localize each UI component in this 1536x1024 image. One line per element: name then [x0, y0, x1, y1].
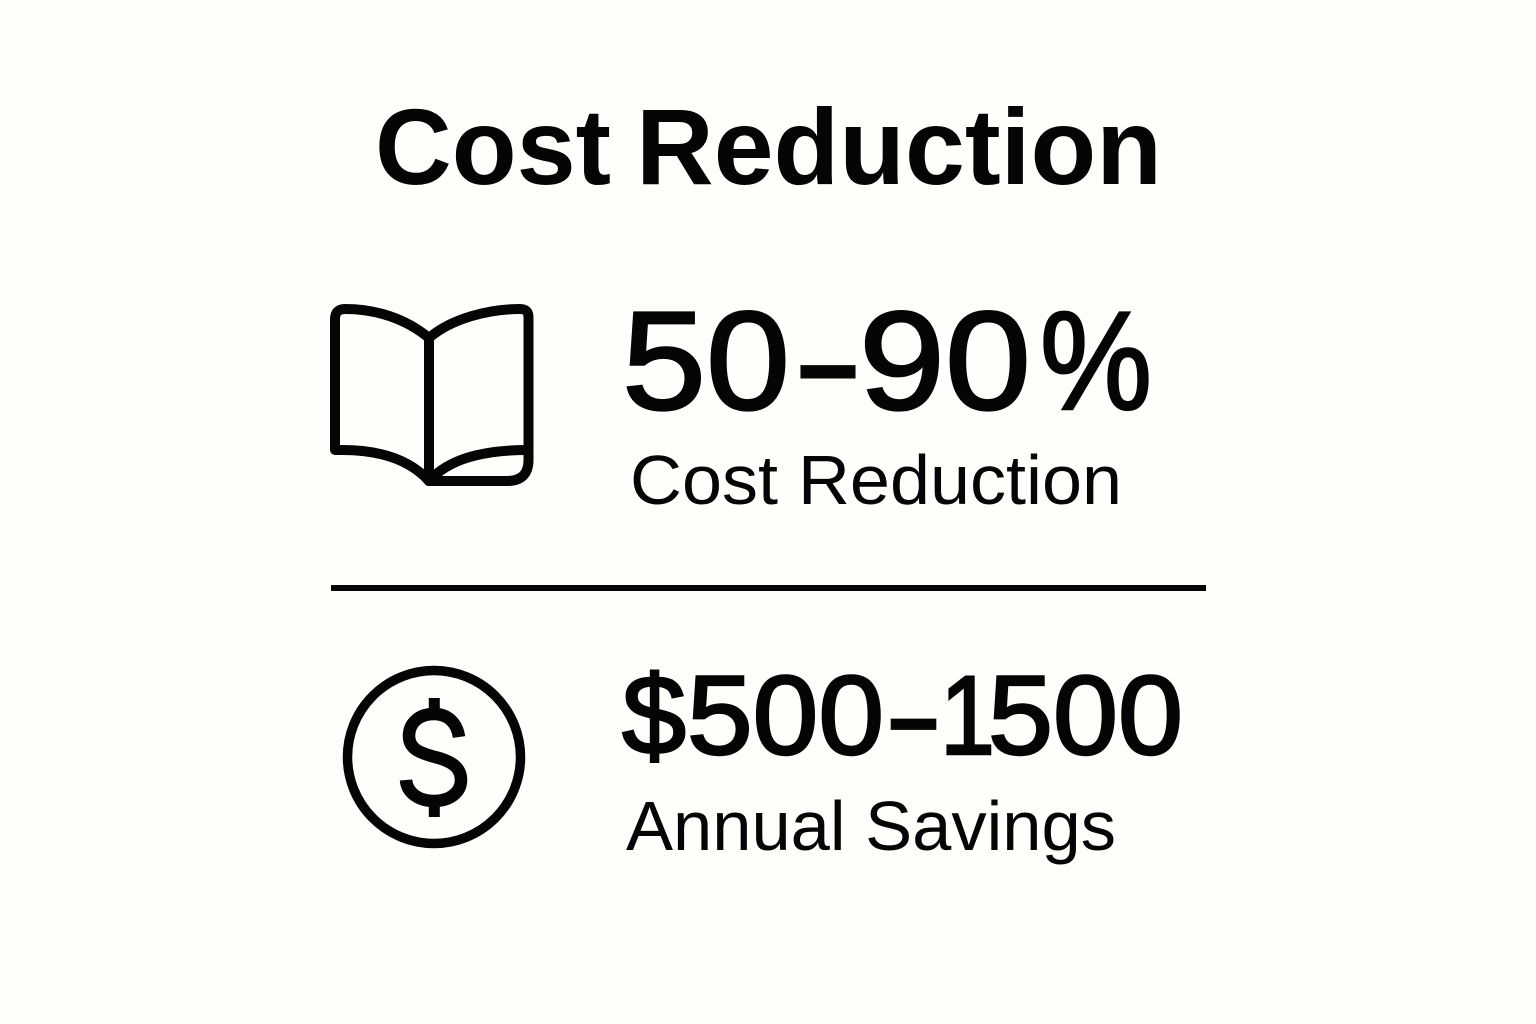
stat: 50-90%: 90 [859, 282, 1031, 439]
stat: $500-1500: 500 [687, 653, 884, 778]
label: annual savings: Annual Savings [626, 787, 1116, 865]
icon: open book [335, 309, 528, 481]
title: Reduction [636, 86, 1162, 207]
title: Cost [375, 86, 611, 207]
stat: $500-1500: $ [622, 653, 686, 778]
stat: 50-90%: 50 [622, 282, 790, 439]
divider [331, 585, 1206, 591]
stat: $500-1500: 500 [988, 653, 1183, 778]
label: cost reduction: Cost Reduction [630, 441, 1122, 519]
stat: $500-1500: 1 [940, 653, 995, 778]
stat: 50-90%: - [793, 282, 863, 439]
stat: $500-1500: - [885, 653, 942, 778]
stat: 50-90%: % [1040, 282, 1152, 439]
icon: dollar coin [348, 670, 520, 844]
